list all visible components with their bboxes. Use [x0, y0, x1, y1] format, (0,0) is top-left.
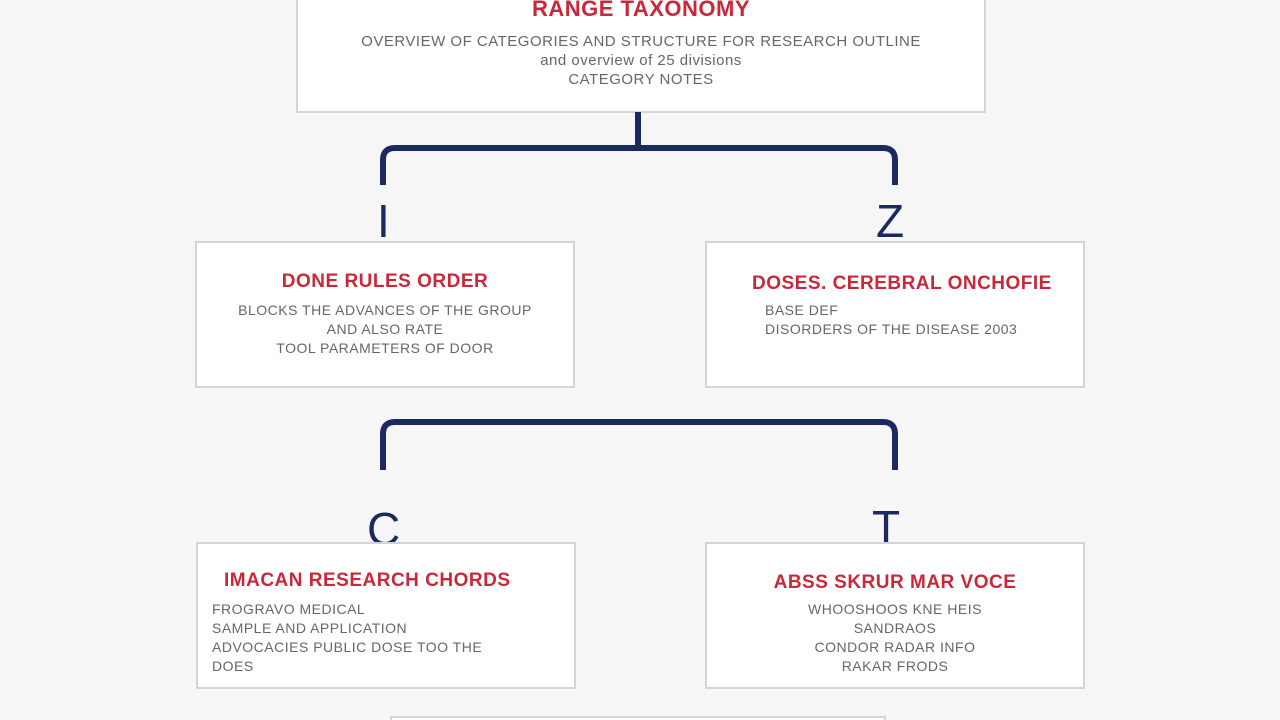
- box: right 2: SANDRAOS: [854, 620, 936, 636]
- box: left 2: ADVOCACIES PUBLIC DOSE TOO THE: [212, 639, 482, 655]
- top text: CATEGORY NOTES: [568, 71, 714, 88]
- box: left 2: [196, 542, 576, 689]
- box: left 1: AND ALSO RATE: [327, 321, 443, 337]
- box: right 1: DISORDERS OF THE DISEASE 2003: [765, 321, 1017, 337]
- box: right 1: [705, 241, 1085, 388]
- box: left 2: SAMPLE AND APPLICATION: [212, 620, 407, 636]
- box: right 2: WHOOSHOOS KNE HEIS: [808, 601, 982, 617]
- box: left 1: BLOCKS THE ADVANCES OF THE GROUP: [238, 302, 532, 318]
- box: right 1: BASE DEF: [765, 302, 838, 318]
- top box: [296, 0, 986, 113]
- box: left 1: DONE RULES ORDER: [282, 271, 488, 292]
- top text: [361, 33, 921, 88]
- box: left 2: FROGRAVO MEDICAL: [212, 601, 365, 617]
- box: right 2: [705, 542, 1085, 689]
- box: left 1: [195, 241, 575, 388]
- box: right 2: CONDOR RADAR INFO: [815, 639, 975, 655]
- top text: and overview of 25 divisions: [540, 52, 742, 69]
- letter C: C: [367, 503, 400, 555]
- letter Z: Z: [876, 195, 904, 247]
- box: left 2: DOES: [212, 658, 254, 674]
- box: right 2: RAKAR FRODS: [842, 658, 948, 674]
- box: right 1: DOSES. CEREBRAL ONCHOFIE: [752, 273, 1052, 294]
- box: left 1: TOOL PARAMETERS OF DOOR: [276, 340, 494, 356]
- box: right 2: ABSS SKRUR MAR VOCE: [774, 572, 1016, 593]
- letter I: I: [377, 195, 390, 247]
- top text: OVERVIEW OF CATEGORIES AND STRUCTURE FOR RESEARCH OUTLINE: [361, 33, 921, 50]
- bottom box: [390, 716, 886, 720]
- box: left 2: IMACAN RESEARCH CHORDS: [224, 570, 511, 591]
- letter T: T: [872, 501, 900, 553]
